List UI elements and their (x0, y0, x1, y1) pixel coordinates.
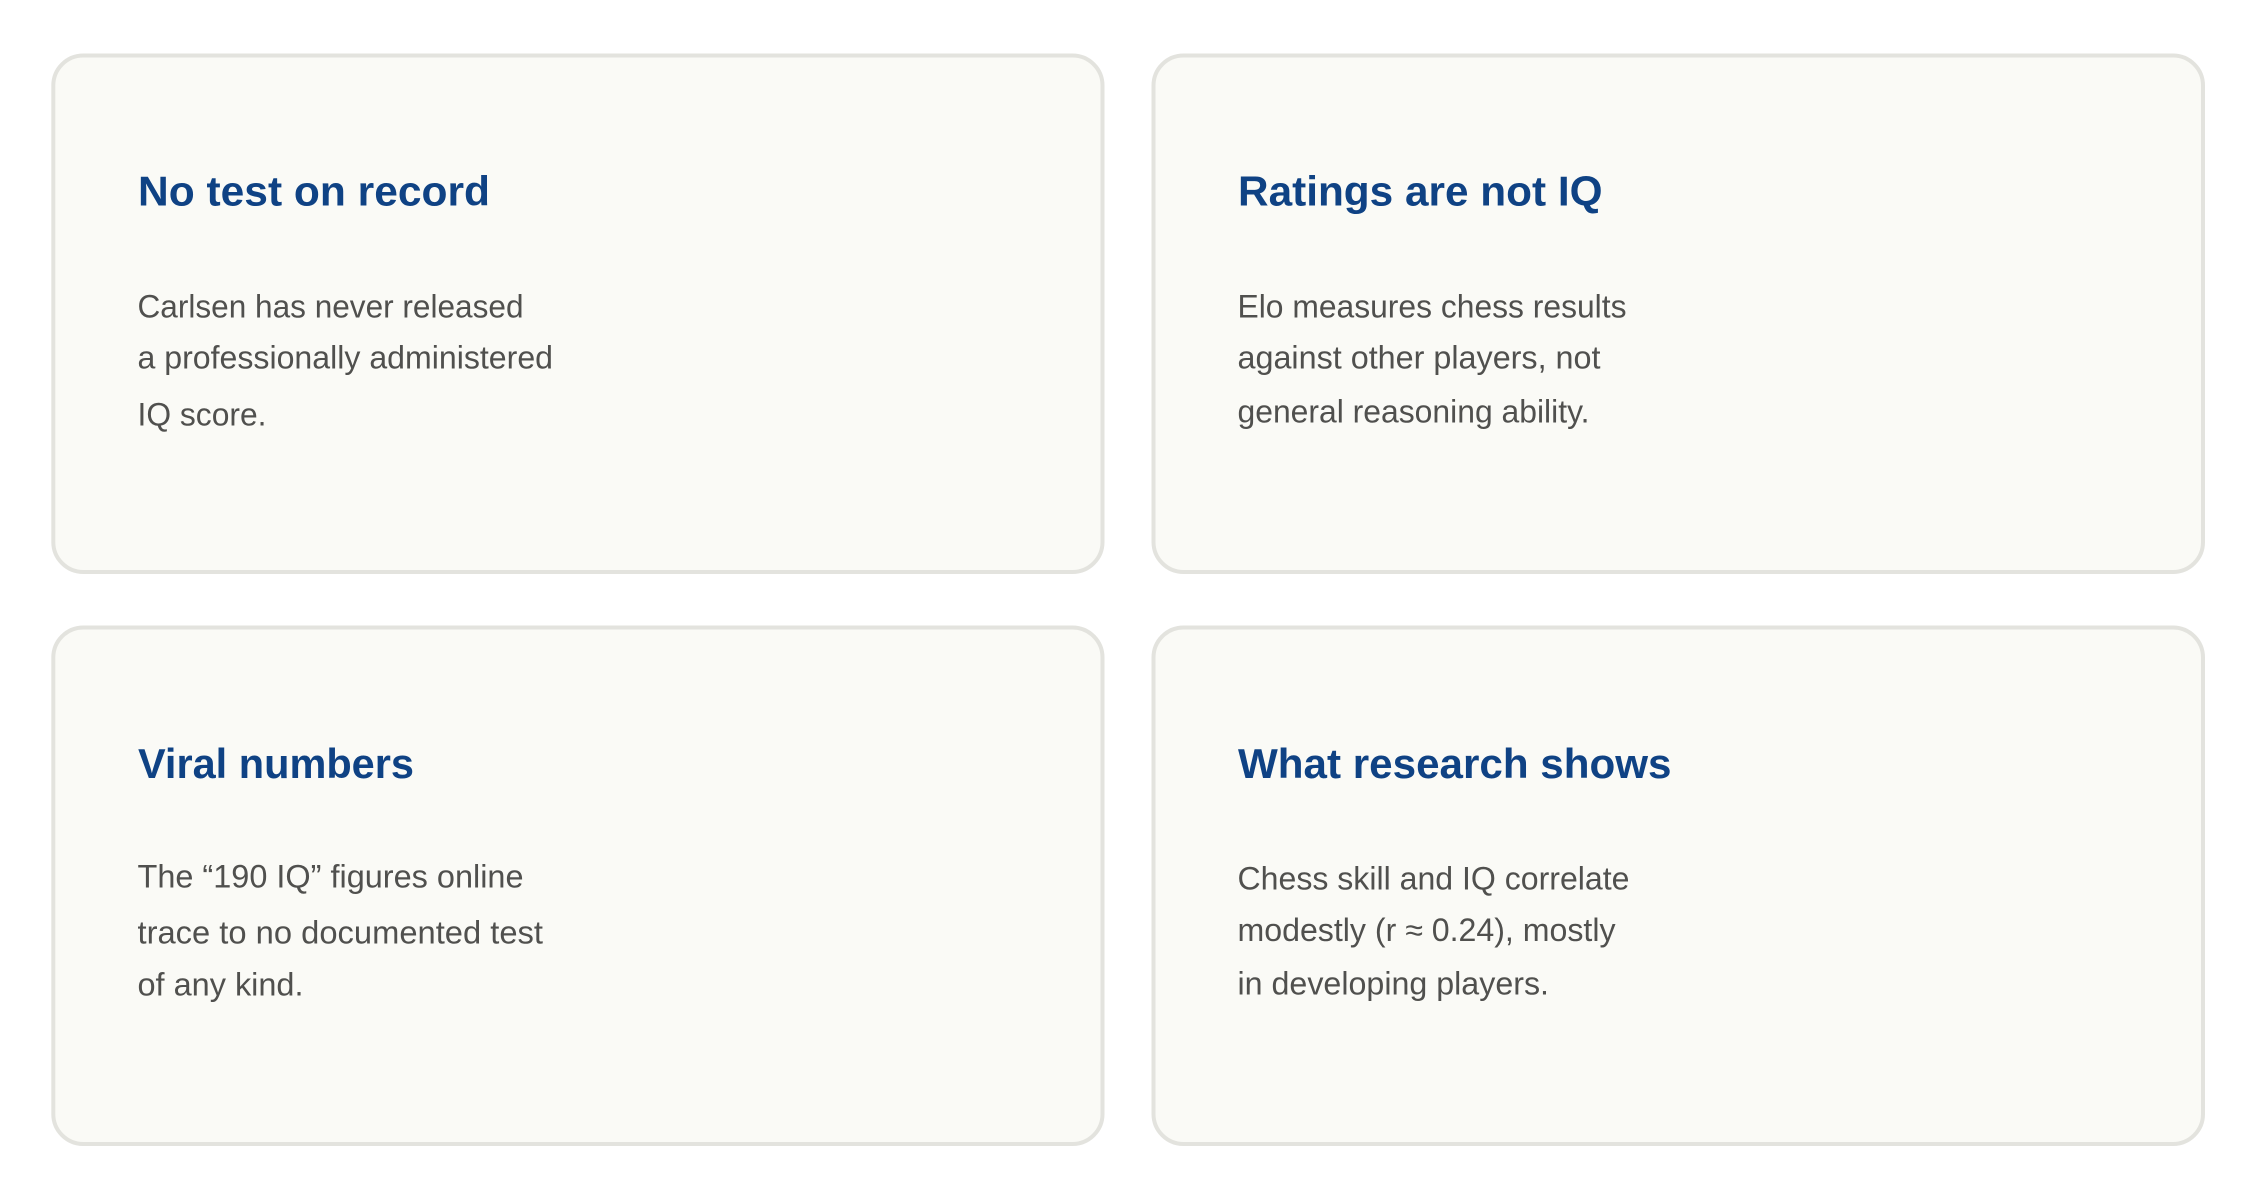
panel: ratings are not IQ (1154, 56, 2203, 572)
text block: what research shows: Chess skill and IQ correlate (1238, 860, 1630, 896)
heading: viral numbers: Viral numbers (138, 740, 414, 787)
text block: viral numbers: of any kind. (138, 966, 304, 1002)
text block: ratings are not IQ: Elo measures chess results (1238, 288, 1626, 324)
text block: what research shows: in developing players. (1238, 966, 1549, 1002)
panel: viral numbers (53, 628, 1102, 1144)
panel: what research shows (1154, 628, 2203, 1144)
text block: no test on record: IQ score. (138, 396, 266, 432)
text block: ratings are not IQ: general reasoning ability. (1238, 394, 1590, 430)
heading: no test on record: No test on record (138, 168, 490, 214)
text block: no test on record: a professionally administered (138, 340, 553, 376)
panel: no test on record (53, 56, 1102, 572)
heading: what research shows: What research shows (1238, 740, 1672, 787)
text block: ratings are not IQ (1238, 288, 1626, 430)
text block: no test on record (138, 288, 553, 432)
text block: viral numbers (138, 858, 543, 1002)
text block: no test on record: Carlsen has never released (138, 288, 524, 324)
text block: ratings are not IQ: against other players, not (1238, 340, 1601, 376)
text block: viral numbers: trace to no documented test (138, 914, 543, 950)
text block: what research shows: modestly (r ≈ 0.24), mostly (1238, 912, 1616, 948)
text block: viral numbers: The “190 IQ” figures online (138, 858, 524, 894)
text block: what research shows (1238, 860, 1630, 1002)
heading: ratings are not IQ: Ratings are not IQ (1238, 168, 1602, 214)
